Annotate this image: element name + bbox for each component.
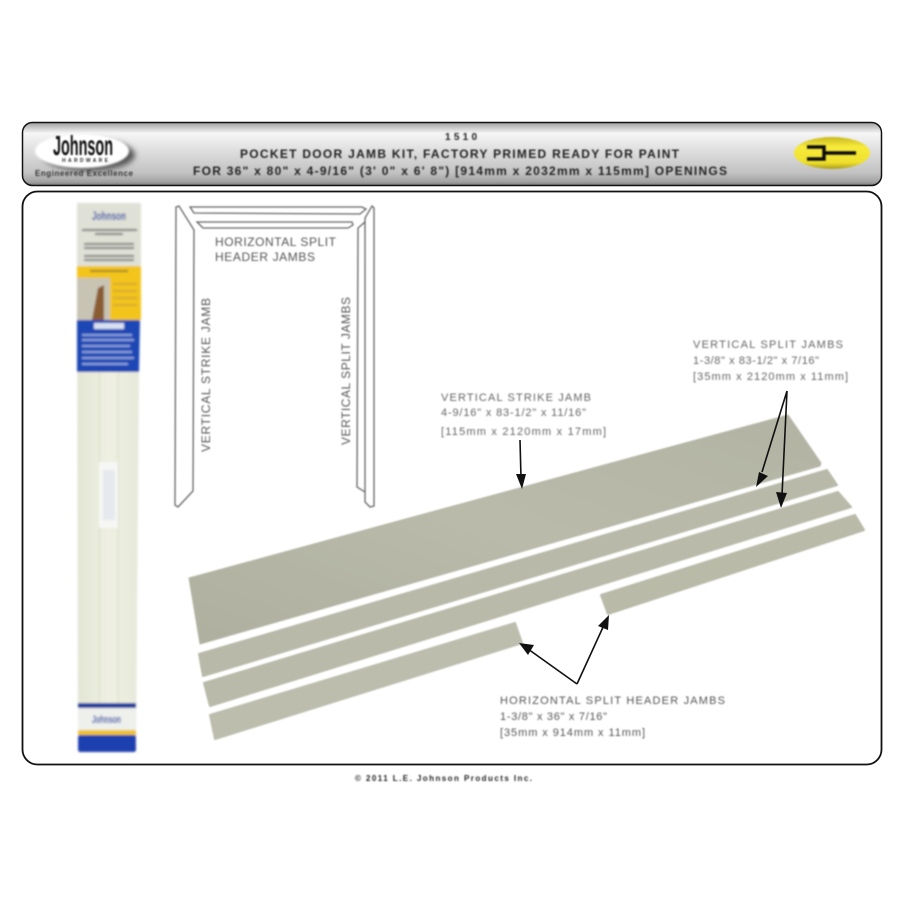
- label: horizontal split header jambs dimensions: 1-3/8" x 36" x 7/16": [500, 711, 607, 723]
- logo: Johnson: HARDWARE: [62, 158, 109, 164]
- label: horizontal split header jambs: HEADER JAMBS: [215, 250, 315, 264]
- label: vertical strike jamb dimensions: 4-9/16" x 83-1/2" x 11/16": [441, 407, 586, 419]
- product package: [77, 203, 141, 752]
- label: vertical strike jamb dimensions: VERTICAL STRIKE JAMB: [441, 392, 591, 404]
- label: vertical split jambs dimensions: [35mm x 2120mm x 11mm]: [693, 371, 848, 383]
- logo: Johnson: [35, 130, 135, 178]
- label: horizontal split header jambs: HORIZONTAL SPLIT: [215, 235, 337, 249]
- label: horizontal split header jambs dimensions: [35mm x 914mm x 11mm]: [500, 727, 645, 739]
- main panel: [22, 192, 882, 764]
- label: vertical strike jamb dimensions: [441, 392, 606, 438]
- label: vertical strike jamb dimensions: [115mm x 2120mm x 17mm]: [441, 426, 606, 438]
- vertical split jamb outlines: [357, 206, 374, 507]
- vertical split jamb board 2: [204, 492, 851, 706]
- icon: yellow jamb badge: [794, 137, 870, 169]
- title text: 1510: [445, 132, 477, 143]
- horizontal header jamb board right: [601, 515, 864, 614]
- title text: POCKET DOOR JAMB KIT, FACTORY PRIMED READY FOR PAINT: [240, 147, 680, 161]
- arrow: vertical strike jamb: [516, 440, 526, 489]
- package window: [99, 462, 118, 528]
- label: vertical split jambs dimensions: 1-3/8" x 83-1/2" x 7/16": [693, 355, 819, 367]
- horizontal split header jamb outlines: [190, 207, 366, 228]
- vertical split jamb board 1: [199, 470, 837, 676]
- vertical strike jamb board: [189, 415, 821, 644]
- label: horizontal split header jambs: [215, 235, 337, 264]
- vertical strike jamb outline: [175, 206, 194, 507]
- title text: FOR 36" x 80" x 4-9/16" (3' 0" x 6' 8") [914mm x 2032mm x 115mm] OPENINGS: [193, 164, 727, 178]
- logo: Johnson: Engineered Excellence: [35, 169, 134, 178]
- arrows: horizontal header jambs: [519, 615, 609, 684]
- label: horizontal split header jambs dimensions: [500, 695, 725, 739]
- product package: Johnson: [92, 714, 121, 726]
- horizontal header jamb board left: [210, 623, 522, 739]
- title text: [193, 132, 727, 178]
- label: vertical split jambs dimensions: [693, 339, 848, 383]
- copyright: © 2011 L.E. Johnson Products Inc.: [355, 774, 532, 783]
- door jamb diagram: [175, 206, 374, 507]
- jamb boards: [189, 415, 864, 739]
- label: vertical split jambs: VERTICAL SPLIT JAMBS: [339, 297, 353, 445]
- label: vertical split jambs dimensions: VERTICAL SPLIT JAMBS: [693, 339, 843, 351]
- label: vertical strike jambs: VERTICAL STRIKE JAMB: [199, 298, 213, 452]
- label: horizontal split header jambs dimensions: HORIZONTAL SPLIT HEADER JAMBS: [500, 695, 725, 707]
- package logo: Johnson: [92, 209, 126, 223]
- header bar: [22, 122, 882, 186]
- arrows: vertical split jambs: [756, 391, 787, 508]
- logo: Johnson: Johnson: [53, 130, 113, 161]
